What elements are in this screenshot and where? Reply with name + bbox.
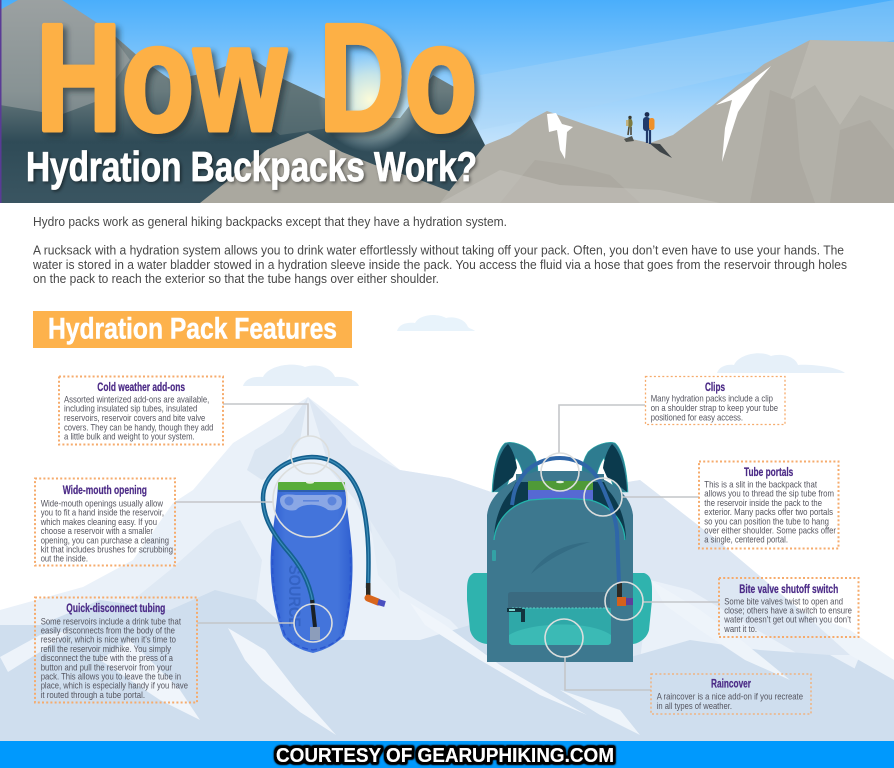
callout: quick-disconnect tubing — [35, 598, 197, 702]
callout: tube portals: the reservoir inside the pack to the — [704, 497, 822, 508]
callout: clips — [646, 376, 785, 424]
callout: cold weather add-ons: covers. They can be handy, though they add — [64, 422, 213, 432]
hydration bladder: SOURCE — [285, 565, 304, 627]
hikers — [624, 112, 672, 158]
callout: wide-mouth opening: you to fit a hand inside the reservoir, — [41, 506, 164, 518]
right strap — [582, 442, 628, 492]
background mountains — [0, 397, 894, 741]
callout: bite valve shutoff switch: water doesn’t get out when you don’t — [723, 614, 851, 624]
section heading: Hydration Pack Features — [48, 312, 337, 346]
callout: quick-disconnect tubing: pack. This allows you to leave the tube in — [41, 670, 181, 682]
callout: raincover: in all types of weather. — [657, 700, 732, 711]
hydration bladder — [263, 457, 385, 653]
subtitle: Hydration Backpacks Work? — [26, 143, 477, 190]
callout: tube portals: so you can position the tube to hang — [704, 516, 829, 526]
callout: tube portals: over either shoulder. Some packs offer — [704, 524, 836, 536]
callout: wide-mouth opening: kit that includes brushes for scrubbing — [41, 544, 173, 554]
intro text — [32, 214, 847, 286]
callout: tube portals: a single, centered portal. — [704, 534, 788, 544]
intro text: Hydro packs work as general hiking backpacks except that they have a hydration system. — [33, 214, 507, 229]
pack body — [487, 471, 633, 662]
callout: bite valve shutoff switch: Bite valve shutoff switch — [739, 584, 838, 596]
callout: clips: Many hydration packs include a clip — [651, 392, 773, 404]
callout: bite valve shutoff switch: want it to. — [723, 623, 757, 634]
callout: cold weather add-ons: including insulated sip tubes, insulated — [64, 402, 197, 414]
callout: cold weather add-ons: a little bulk and weight to your system. — [64, 430, 195, 442]
intro text: water is stored in a water bladder stowed in a hydration sleeve inside the pack. You access the fluid via a hose that goes from the reservoir through holes — [32, 257, 847, 272]
callout: quick-disconnect tubing: it routed through a tube portal. — [41, 689, 145, 700]
callout: bite valve shutoff switch: close; others have a switch to ensure — [724, 604, 852, 616]
side pockets — [467, 573, 487, 644]
highlight circles — [273, 436, 643, 657]
footer bar — [0, 741, 894, 768]
callout: quick-disconnect tubing: refill the reservoir midhike. You simply — [41, 643, 171, 654]
callout: quick-disconnect tubing: easily disconnects from the body of the — [41, 624, 175, 636]
callout: tube portals: Tube portals — [744, 467, 793, 479]
callout: bite valve shutoff switch — [719, 578, 858, 637]
shoulder overlay — [516, 474, 604, 482]
foothill — [200, 133, 480, 203]
callout: wide-mouth opening: which makes cleaning easy. If you — [40, 516, 157, 527]
left dark mountains — [0, 0, 500, 203]
callout: quick-disconnect tubing: button and pull the reservoir from your — [41, 662, 172, 672]
cloud — [243, 365, 359, 386]
left strap — [492, 442, 538, 492]
callout: raincover — [651, 674, 811, 714]
cloud — [397, 315, 475, 331]
intro text: A rucksack with a hydration system allows you to drink water effortlessly without taking off your pack. Often, you don’t even have to use your hands. The — [33, 242, 844, 258]
callout: tube portals: This is a slit in the backpack that — [704, 478, 817, 490]
front flap — [494, 498, 625, 640]
bladder in pack — [528, 490, 593, 502]
header illustration — [0, 0, 894, 203]
callout: bite valve shutoff switch: Some bite valves twist to open and — [724, 596, 843, 606]
right strap inner — [603, 444, 627, 492]
callout: wide-mouth opening: choose a reservoir with a smaller — [41, 525, 153, 536]
cloud — [717, 353, 845, 373]
callout: quick-disconnect tubing: reservoir, which is nice when it’s time to — [41, 634, 176, 644]
right grey mountains — [440, 40, 894, 203]
left strap inner — [493, 444, 517, 492]
callout: raincover: A raincover is a nice add-on if you recreate — [657, 690, 803, 702]
callout: wide-mouth opening: out the inside. — [41, 552, 88, 564]
callout: cold weather add-ons: Assorted winterized add-ons are available, — [64, 394, 209, 404]
callout: wide-mouth opening: Wide-mouth openings usually allow — [41, 498, 163, 508]
callout: quick-disconnect tubing: place, which is especially handy if you have — [41, 680, 188, 690]
callout: cold weather add-ons: Cold weather add-ons — [97, 382, 185, 394]
callout: raincover: Raincover — [711, 678, 751, 690]
inner opening — [494, 482, 626, 540]
footer bar: COURTESY OF GEARUPHIKING.COM — [276, 745, 614, 767]
callout: clips: on a shoulder strap to keep your tube — [651, 402, 778, 413]
front pocket — [508, 592, 610, 608]
callout: tube portals — [699, 462, 838, 548]
callout: tube portals: allows you to thread the sip tube from — [704, 488, 834, 498]
callout: tube portals: exterior. Many packs offer two portals — [704, 506, 833, 517]
connector lines — [175, 404, 719, 690]
callout: quick-disconnect tubing: Quick-disconnect tubing — [66, 603, 165, 615]
callout: quick-disconnect tubing: disconnect the tube with the press of a — [41, 652, 174, 663]
drinking tube — [512, 458, 619, 583]
snow patches — [547, 113, 573, 159]
callout: wide-mouth opening: opening, you can purchase a cleaning — [41, 534, 169, 546]
callout: cold weather add-ons: reservoirs, reservoir covers and bite valve — [64, 412, 205, 423]
callout: clips: Clips — [705, 382, 725, 394]
backpack — [467, 442, 652, 662]
callout: clips: positioned for easy access. — [651, 412, 743, 422]
intro text: on the pack to reach the exterior so that the tube hangs over either shoulder. — [33, 271, 439, 286]
callout: wide-mouth opening: Wide-mouth opening — [63, 485, 147, 497]
callout: cold weather add-ons — [59, 376, 223, 444]
callout: wide-mouth opening — [35, 478, 175, 566]
callout: quick-disconnect tubing: Some reservoirs include a drink tube that — [41, 616, 181, 626]
